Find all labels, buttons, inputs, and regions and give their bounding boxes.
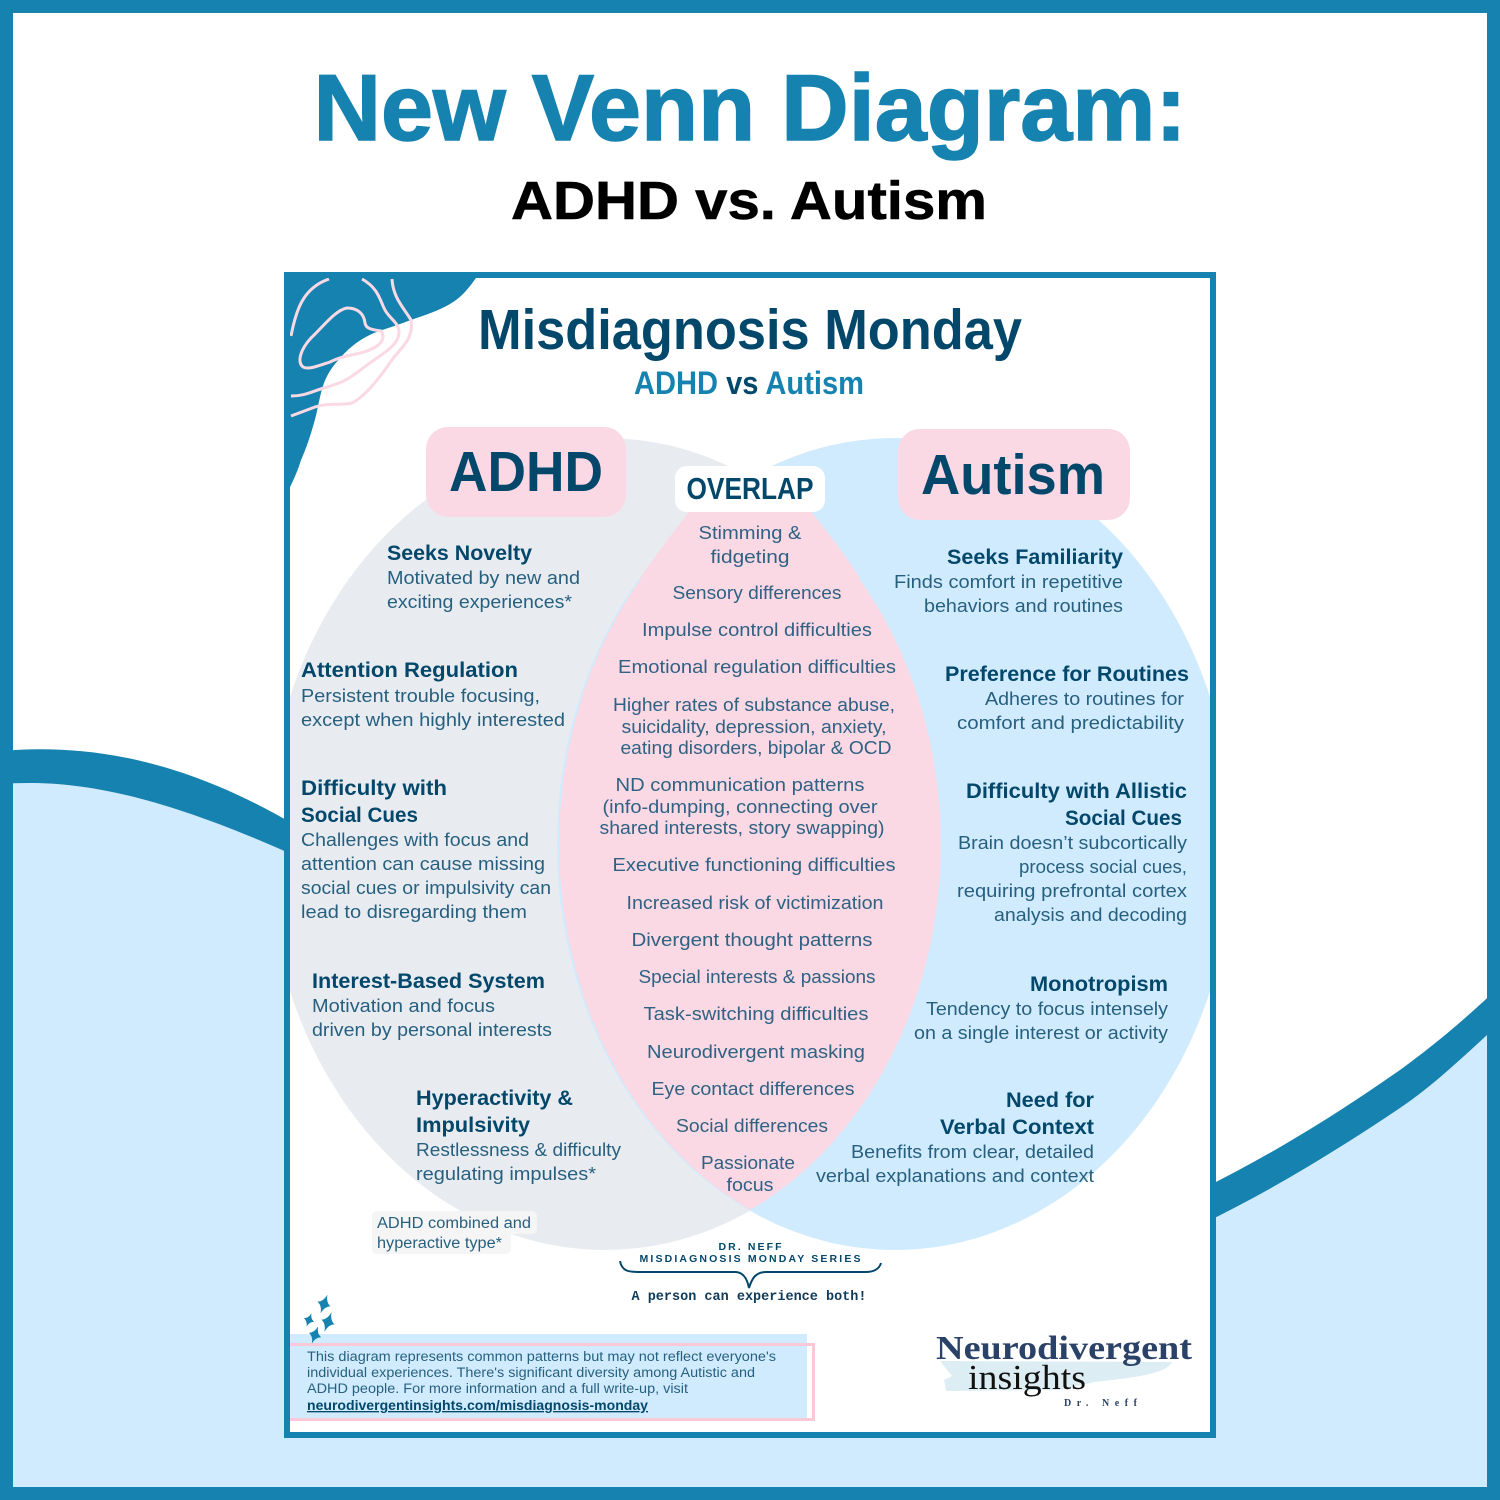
ADHD footnote tag: hyperactive type* bbox=[377, 1235, 502, 1252]
overlap list: Executive functioning difficulties bbox=[612, 854, 896, 875]
overlap lens bbox=[559, 478, 941, 1210]
series bracket note: MISDIAGNOSIS MONDAY SERIES bbox=[640, 1253, 860, 1265]
Need for Verbal Context: Need for bbox=[1006, 1089, 1094, 1112]
overlap list: Divergent thought patterns bbox=[632, 929, 872, 950]
Seeks Novelty: exciting experiences* bbox=[387, 591, 572, 612]
logo: insights bbox=[968, 1358, 1086, 1397]
overlap list: eating disorders, bipolar & OCD bbox=[620, 737, 892, 758]
Preference for Routines: Adheres to routines for bbox=[985, 688, 1184, 709]
Hyperactivity and Impulsivity bbox=[416, 1087, 622, 1184]
Difficulty with Allistic Social Cues: requiring prefrontal cortex bbox=[957, 880, 1188, 901]
Hyperactivity and Impulsivity: Impulsivity bbox=[416, 1114, 530, 1137]
ADHD footnote tag bbox=[372, 1211, 537, 1254]
card border bbox=[287, 275, 1213, 1435]
Monotropism: Monotropism bbox=[1030, 973, 1168, 996]
series bracket note: DR. NEFF bbox=[718, 1241, 782, 1253]
Difficulty with Social Cues: Challenges with focus and bbox=[301, 829, 529, 850]
logo: Neurodivergent bbox=[936, 1330, 1193, 1367]
Difficulty with Social Cues bbox=[301, 777, 551, 922]
Difficulty with Allistic Social Cues: Difficulty with Allistic bbox=[966, 780, 1187, 803]
Difficulty with Allistic Social Cues: process social cues, bbox=[1019, 856, 1187, 877]
overlap list: suicidality, depression, anxiety, bbox=[622, 716, 886, 737]
logo bbox=[936, 1330, 1193, 1409]
disclaimer box: ADHD people. For more information and a full write-up, visit bbox=[307, 1381, 688, 1396]
Attention Regulation: Attention Regulation bbox=[301, 659, 518, 682]
overlap list: Eye contact differences bbox=[652, 1078, 854, 1099]
series bracket note: A person can experience both! bbox=[632, 1290, 866, 1305]
overlap list: ND communication patterns bbox=[616, 774, 864, 795]
Difficulty with Allistic Social Cues bbox=[957, 780, 1188, 925]
main title: New Venn Diagram: bbox=[314, 55, 1186, 160]
Attention Regulation bbox=[301, 659, 565, 730]
Difficulty with Allistic Social Cues: Social Cues bbox=[1065, 807, 1182, 830]
overlap list: Neurodivergent masking bbox=[647, 1041, 865, 1062]
Difficulty with Allistic Social Cues: analysis and decoding bbox=[994, 904, 1187, 925]
Difficulty with Social Cues: lead to disregarding them bbox=[301, 901, 527, 922]
disclaimer box bbox=[290, 1334, 814, 1420]
Difficulty with Social Cues: Social Cues bbox=[301, 804, 418, 827]
overlap list: Task-switching difficulties bbox=[644, 1003, 868, 1024]
overlap list: Passionate bbox=[701, 1152, 795, 1173]
Preference for Routines: comfort and predictability bbox=[957, 712, 1185, 733]
overlap list: Sensory differences bbox=[672, 582, 842, 603]
Seeks Familiarity: Seeks Familiarity bbox=[947, 546, 1123, 569]
card subheading: ADHD vs Autism bbox=[634, 365, 864, 401]
Need for Verbal Context bbox=[816, 1089, 1094, 1186]
Seeks Novelty: Motivated by new and bbox=[387, 567, 580, 588]
Need for Verbal Context: verbal explanations and context bbox=[816, 1165, 1094, 1186]
Monotropism: Tendency to focus intensely bbox=[926, 998, 1169, 1019]
Need for Verbal Context: Benefits from clear, detailed bbox=[851, 1141, 1094, 1162]
Interest-Based System: Motivation and focus bbox=[312, 995, 495, 1016]
Monotropism: on a single interest or activity bbox=[914, 1022, 1169, 1043]
overlap list: Impulse control difficulties bbox=[642, 619, 872, 640]
disclaimer box: This diagram represents common patterns but may not reflect everyone's bbox=[307, 1349, 776, 1364]
overlap list: fidgeting bbox=[710, 546, 790, 567]
Autism column bbox=[816, 546, 1189, 1186]
ADHD label: ADHD bbox=[449, 440, 603, 504]
disclaimer box: neurodivergentinsights.com/misdiagnosis-monday bbox=[307, 1398, 649, 1413]
Interest-Based System: Interest-Based System bbox=[312, 970, 545, 993]
Autism circle bbox=[557, 438, 1233, 1250]
panel: infographic card bbox=[267, 275, 1233, 1435]
Interest-Based System: driven by personal interests bbox=[312, 1019, 552, 1040]
overlap list: shared interests, story swapping) bbox=[600, 817, 884, 838]
series bracket note bbox=[620, 1241, 881, 1305]
overlap list: focus bbox=[726, 1174, 774, 1195]
Monotropism bbox=[914, 973, 1169, 1043]
Seeks Novelty bbox=[387, 542, 580, 612]
card heading: Misdiagnosis Monday bbox=[478, 298, 1022, 362]
icon: curly bracket bbox=[620, 1261, 881, 1288]
Hyperactivity and Impulsivity: Restlessness & difficulty bbox=[416, 1139, 622, 1160]
overlap list bbox=[600, 522, 896, 1195]
logo: Dr. Neff bbox=[1064, 1398, 1138, 1409]
overlap list: Stimming & bbox=[698, 522, 802, 543]
overlap list: Special interests & passions bbox=[638, 966, 876, 987]
Seeks Familiarity: Finds comfort in repetitive bbox=[894, 571, 1123, 592]
Difficulty with Social Cues: Difficulty with bbox=[301, 777, 447, 800]
overlap list: Higher rates of substance abuse, bbox=[613, 694, 895, 715]
Preference for Routines bbox=[945, 663, 1189, 733]
overlap list: Social differences bbox=[676, 1115, 828, 1136]
Hyperactivity and Impulsivity: Hyperactivity & bbox=[416, 1087, 573, 1110]
disclaimer box: individual experiences. There's significant diversity among Autistic and bbox=[307, 1365, 755, 1380]
ADHD label bbox=[426, 427, 626, 517]
Seeks Familiarity bbox=[894, 546, 1123, 616]
Difficulty with Allistic Social Cues: Brain doesn’t subcortically bbox=[958, 832, 1188, 853]
ADHD footnote tag: ADHD combined and bbox=[377, 1215, 531, 1232]
Attention Regulation: Persistent trouble focusing, bbox=[301, 685, 540, 706]
Attention Regulation: except when highly interested bbox=[301, 709, 565, 730]
Preference for Routines: Preference for Routines bbox=[945, 663, 1189, 686]
ADHD circle bbox=[290, 438, 750, 1250]
Autism label: Autism bbox=[921, 443, 1105, 507]
corner blob decoration bbox=[290, 278, 476, 487]
Seeks Familiarity: behaviors and routines bbox=[924, 595, 1123, 616]
subtitle: ADHD vs. Autism bbox=[511, 171, 987, 231]
overlap list: (info-dumping, connecting over bbox=[602, 796, 878, 817]
Interest-Based System bbox=[312, 970, 552, 1040]
overlap list: Increased risk of victimization bbox=[626, 892, 884, 913]
overlap list: Emotional regulation difficulties bbox=[618, 656, 896, 677]
ADHD column bbox=[301, 542, 622, 1184]
Difficulty with Social Cues: social cues or impulsivity can bbox=[301, 877, 551, 898]
Seeks Novelty: Seeks Novelty bbox=[387, 542, 532, 565]
icon: sparkles bbox=[301, 1292, 338, 1346]
Hyperactivity and Impulsivity: regulating impulses* bbox=[416, 1163, 596, 1184]
overlap label bbox=[675, 466, 825, 512]
venn diagram bbox=[267, 438, 1233, 1250]
Difficulty with Social Cues: attention can cause missing bbox=[301, 853, 545, 874]
Autism label bbox=[898, 429, 1130, 520]
Need for Verbal Context: Verbal Context bbox=[940, 1116, 1094, 1139]
overlap label: OVERLAP bbox=[686, 471, 814, 506]
